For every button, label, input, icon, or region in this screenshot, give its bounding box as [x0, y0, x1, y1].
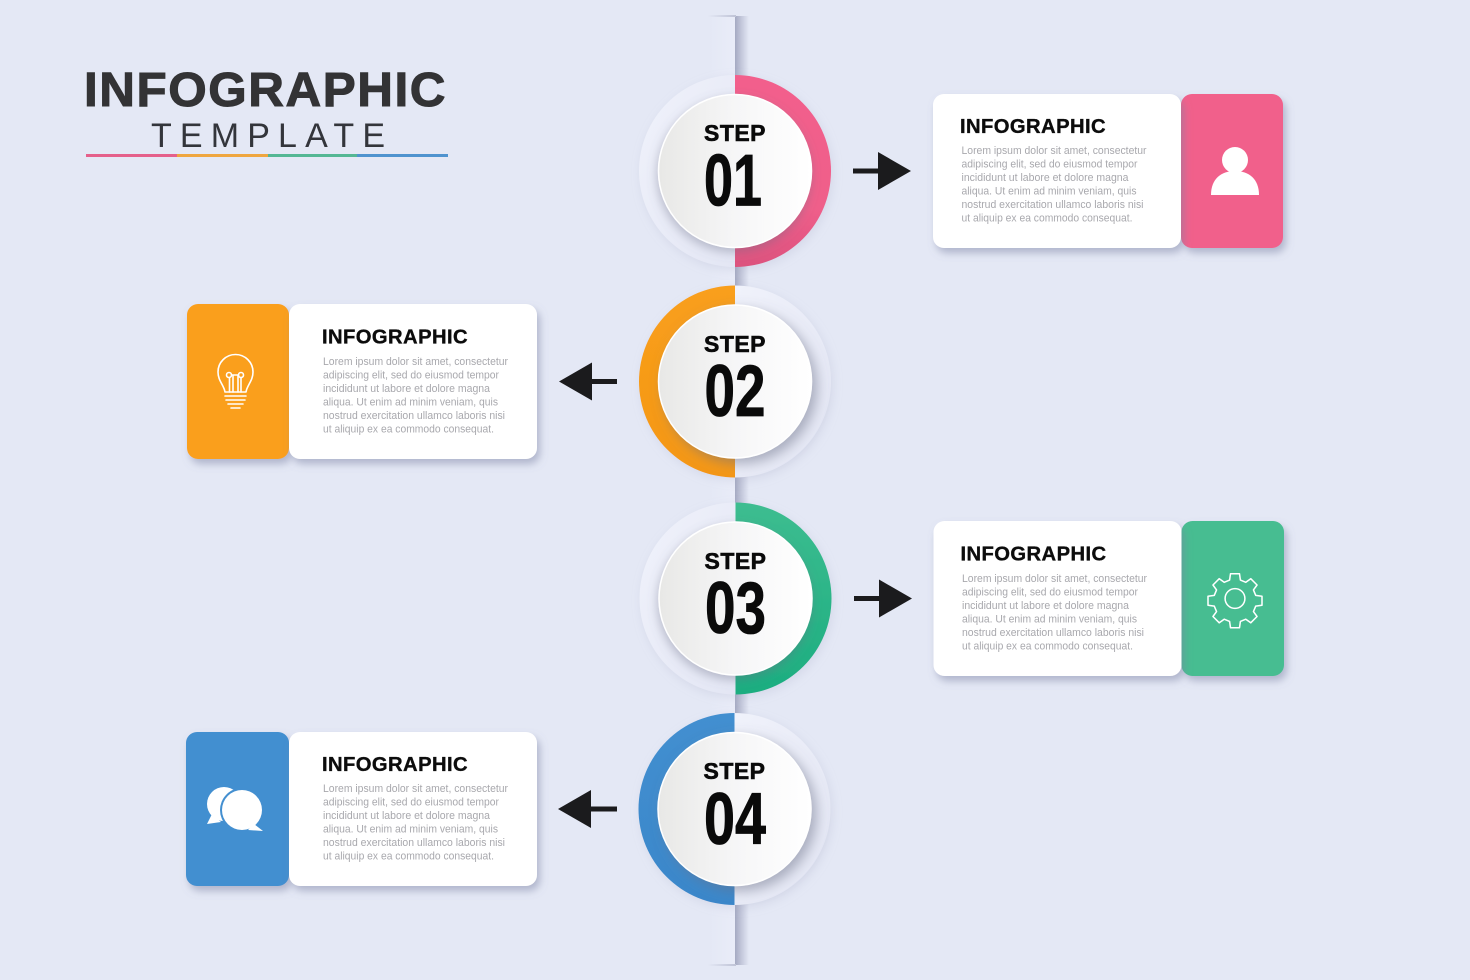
- card heading: INFOGRAPHIC: [322, 326, 468, 348]
- arrow: step 04: [558, 790, 617, 828]
- card body text: incididunt ut labore et dolore magna: [323, 383, 491, 395]
- step 04: [638, 713, 830, 905]
- card body text: adipiscing elit, sed do eiusmod tempor: [323, 796, 499, 808]
- card body text: Lorem ipsum dolor sit amet, consectetur: [962, 573, 1147, 585]
- text panel: [933, 94, 1181, 248]
- icon: gear: [1208, 574, 1262, 628]
- text panel: [934, 521, 1182, 676]
- card body text: Lorem ipsum dolor sit amet, consectetur: [323, 356, 508, 368]
- card body text: nostrud exercitation ullamco laboris nisi: [962, 199, 1144, 211]
- multicolour underline: [86, 154, 448, 157]
- ring: step 01: [639, 75, 831, 267]
- ring: step 04: [638, 713, 830, 905]
- label: STEP 03: STEP: [704, 548, 766, 574]
- timeline spine: [708, 15, 749, 966]
- card body text: incididunt ut labore et dolore magna: [962, 600, 1130, 612]
- number: 03: 03: [705, 568, 766, 649]
- card body text: aliqua. Ut enim ad minim veniam, quis: [323, 824, 498, 836]
- title block: [84, 64, 448, 157]
- label: STEP 01: STEP: [704, 120, 766, 146]
- card body text: ut aliquip ex ea commodo consequat.: [323, 850, 494, 862]
- icon: speech bubbles: [207, 787, 264, 832]
- number: 04: 04: [704, 779, 766, 860]
- card: step 04: [186, 732, 537, 886]
- label: STEP 04: STEP: [704, 758, 766, 784]
- icon: light bulb: [218, 354, 253, 408]
- card body text: nostrud exercitation ullamco laboris nisi: [962, 627, 1144, 639]
- card body text: incididunt ut labore et dolore magna: [323, 810, 491, 822]
- icon: person: [1211, 147, 1259, 195]
- icon panel: orange: [187, 304, 289, 459]
- card: step 03: [934, 521, 1284, 676]
- disc: step 04: [658, 732, 811, 886]
- disc: step 01: [658, 94, 812, 248]
- subheading: TEMPLATE: TEMPLATE: [151, 117, 385, 155]
- number: 01: 01: [704, 140, 762, 222]
- card heading: INFOGRAPHIC: [322, 754, 468, 776]
- disc: step 03: [659, 522, 812, 675]
- heading: INFOGRAPHIC: INFOGRAPHIC: [84, 64, 447, 117]
- card body text: Lorem ipsum dolor sit amet, consectetur: [323, 783, 508, 795]
- icon panel: green: [1182, 521, 1284, 676]
- card body text: ut aliquip ex ea commodo consequat.: [962, 640, 1133, 652]
- text panel: [289, 732, 537, 886]
- card body text: aliqua. Ut enim ad minim veniam, quis: [323, 396, 498, 408]
- card body text: ut aliquip ex ea commodo consequat.: [962, 212, 1132, 224]
- card body text: nostrud exercitation ullamco laboris nisi: [323, 837, 505, 849]
- card body text: adipiscing elit, sed do eiusmod tempor: [962, 158, 1138, 170]
- card body text: adipiscing elit, sed do eiusmod tempor: [962, 586, 1138, 598]
- arrow: step 01: [853, 152, 911, 190]
- number: 02: 02: [704, 351, 766, 432]
- card body text: nostrud exercitation ullamco laboris nisi: [323, 410, 505, 422]
- card body text: adipiscing elit, sed do eiusmod tempor: [323, 370, 499, 382]
- text panel: [289, 304, 537, 459]
- card body text: aliqua. Ut enim ad minim veniam, quis: [962, 614, 1137, 626]
- icon panel: blue: [186, 732, 289, 886]
- arrow: step 02: [559, 362, 617, 400]
- card: step 01: [933, 94, 1283, 248]
- card body text: Lorem ipsum dolor sit amet, consectetur: [962, 145, 1147, 157]
- label: STEP 02: STEP: [704, 331, 766, 357]
- ring: step 02: [639, 286, 831, 478]
- ring: step 03: [640, 502, 832, 694]
- card body text: ut aliquip ex ea commodo consequat.: [323, 424, 494, 436]
- step 03: [640, 502, 832, 694]
- step 01: [639, 75, 831, 267]
- card heading: INFOGRAPHIC: [960, 544, 1106, 566]
- card heading: INFOGRAPHIC: [960, 116, 1106, 138]
- card body text: aliqua. Ut enim ad minim veniam, quis: [962, 186, 1137, 198]
- icon panel: pink: [1181, 94, 1283, 248]
- arrow: step 03: [854, 580, 912, 618]
- disc: step 02: [658, 305, 812, 458]
- card body text: incididunt ut labore et dolore magna: [962, 172, 1129, 184]
- step 02: [639, 286, 831, 478]
- card: step 02: [187, 304, 537, 459]
